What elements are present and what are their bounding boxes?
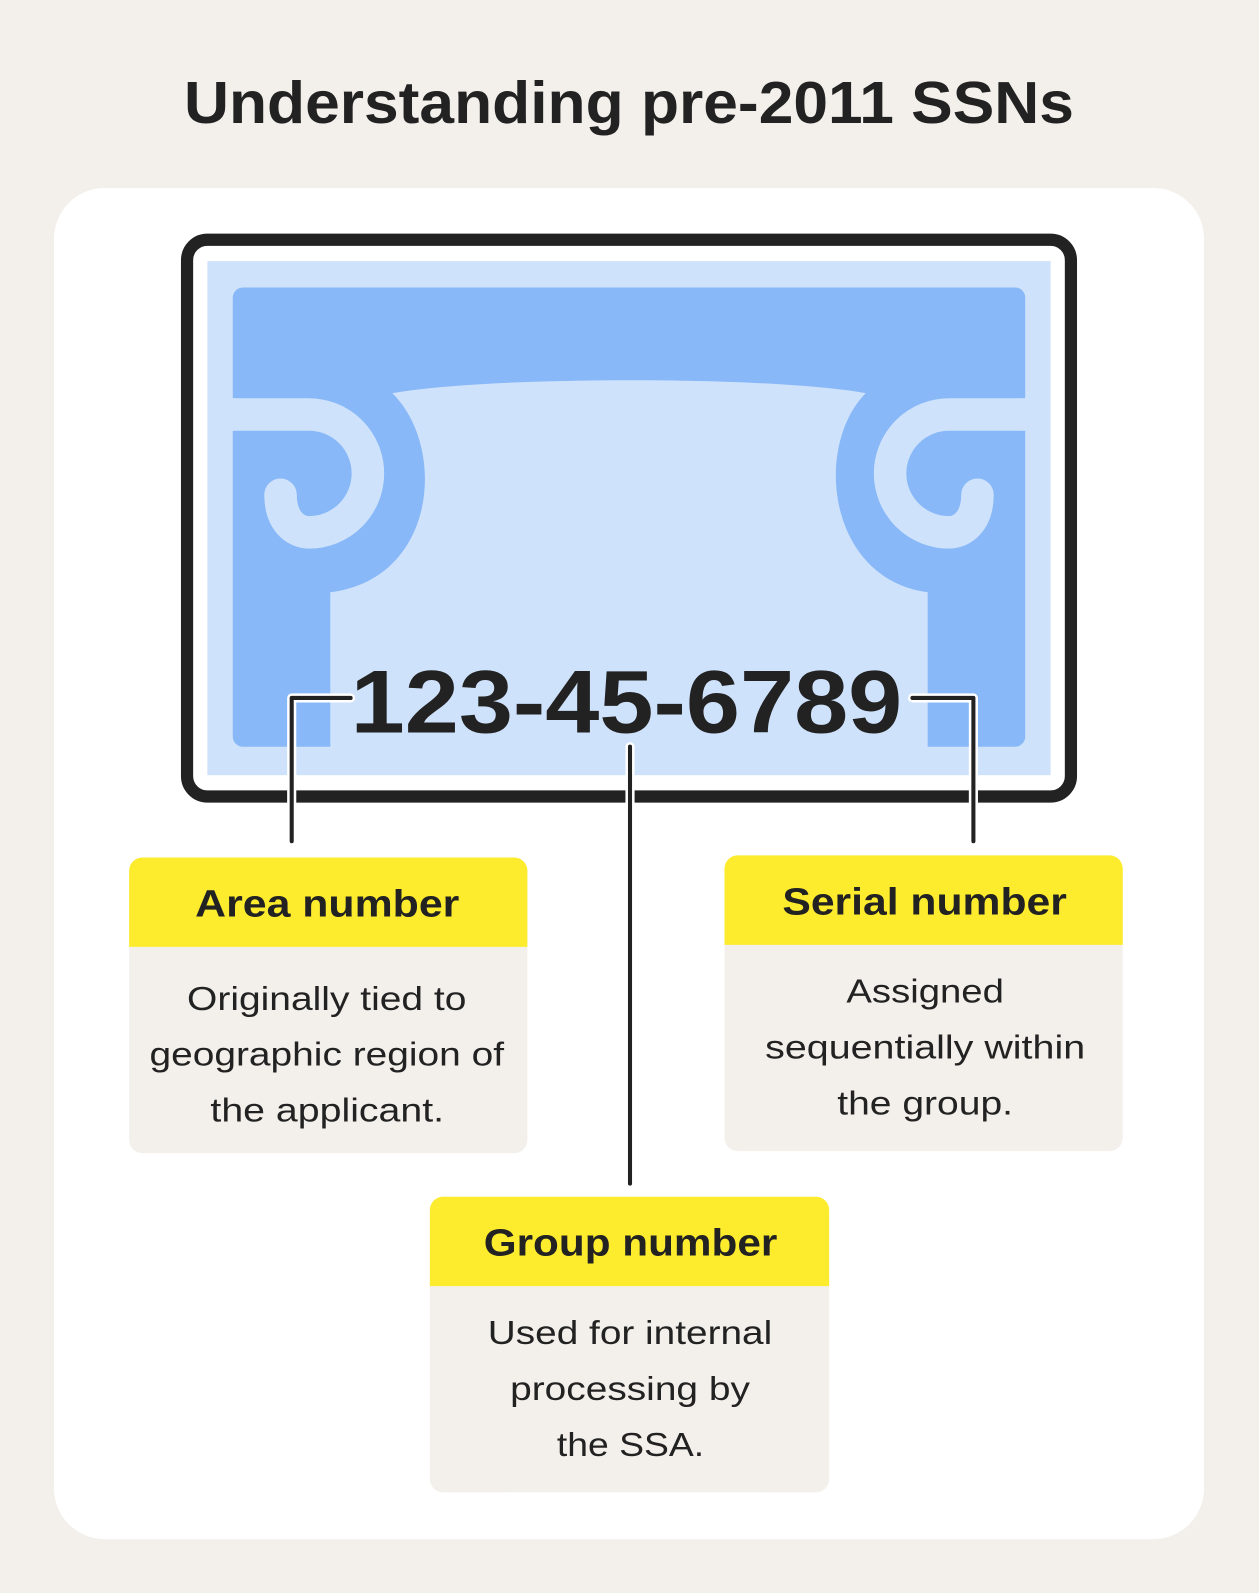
callout: Serial number: sequentially within	[765, 1030, 1085, 1067]
title: Understanding pre-2011 SSNs	[184, 71, 1074, 136]
callout: Area number: the applicant.	[210, 1093, 444, 1130]
callout: Group number: Group number	[484, 1222, 778, 1264]
connector lines	[292, 698, 973, 1184]
callout: Serial number: the group.	[837, 1085, 1013, 1122]
callout: Group number: processing by	[510, 1371, 750, 1408]
callout: Area number: geographic region of	[149, 1037, 505, 1074]
callout: Serial number	[724, 855, 1123, 1151]
callout: Serial number: Assigned	[846, 974, 1004, 1011]
SSN number: 123-45-6789	[351, 651, 902, 751]
callout: Group number: Used for internal	[488, 1315, 772, 1352]
callout: Area number	[129, 857, 527, 1153]
card decoration	[226, 288, 1032, 752]
panel: white background	[54, 188, 1204, 1539]
callout: Serial number: Serial number	[782, 880, 1067, 922]
callout: Area number: Area number	[195, 882, 460, 924]
SSN card	[187, 240, 1071, 796]
callout: Group number: the SSA.	[557, 1427, 704, 1464]
callout: Area number: Originally tied to	[187, 981, 466, 1018]
callout: Group number	[430, 1197, 829, 1492]
